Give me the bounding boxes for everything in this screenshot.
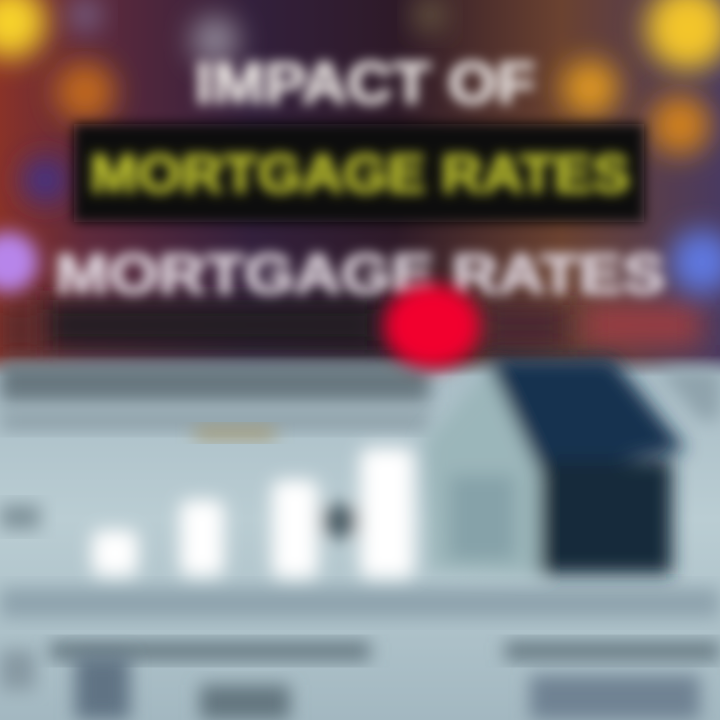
floor surface (0, 355, 720, 720)
background: dark bokeh upper wall (0, 0, 720, 380)
subtitle band: MORTGAGE RATES (55, 242, 665, 305)
title banner (74, 124, 644, 222)
heading line 1: IMPACT OF (195, 51, 535, 116)
icon: house (425, 358, 686, 575)
banner text: MORTGAGE RATES (90, 144, 630, 204)
bar chart: white rising bars (92, 448, 414, 578)
bokeh lights (0, 0, 720, 294)
red marker (384, 284, 480, 368)
